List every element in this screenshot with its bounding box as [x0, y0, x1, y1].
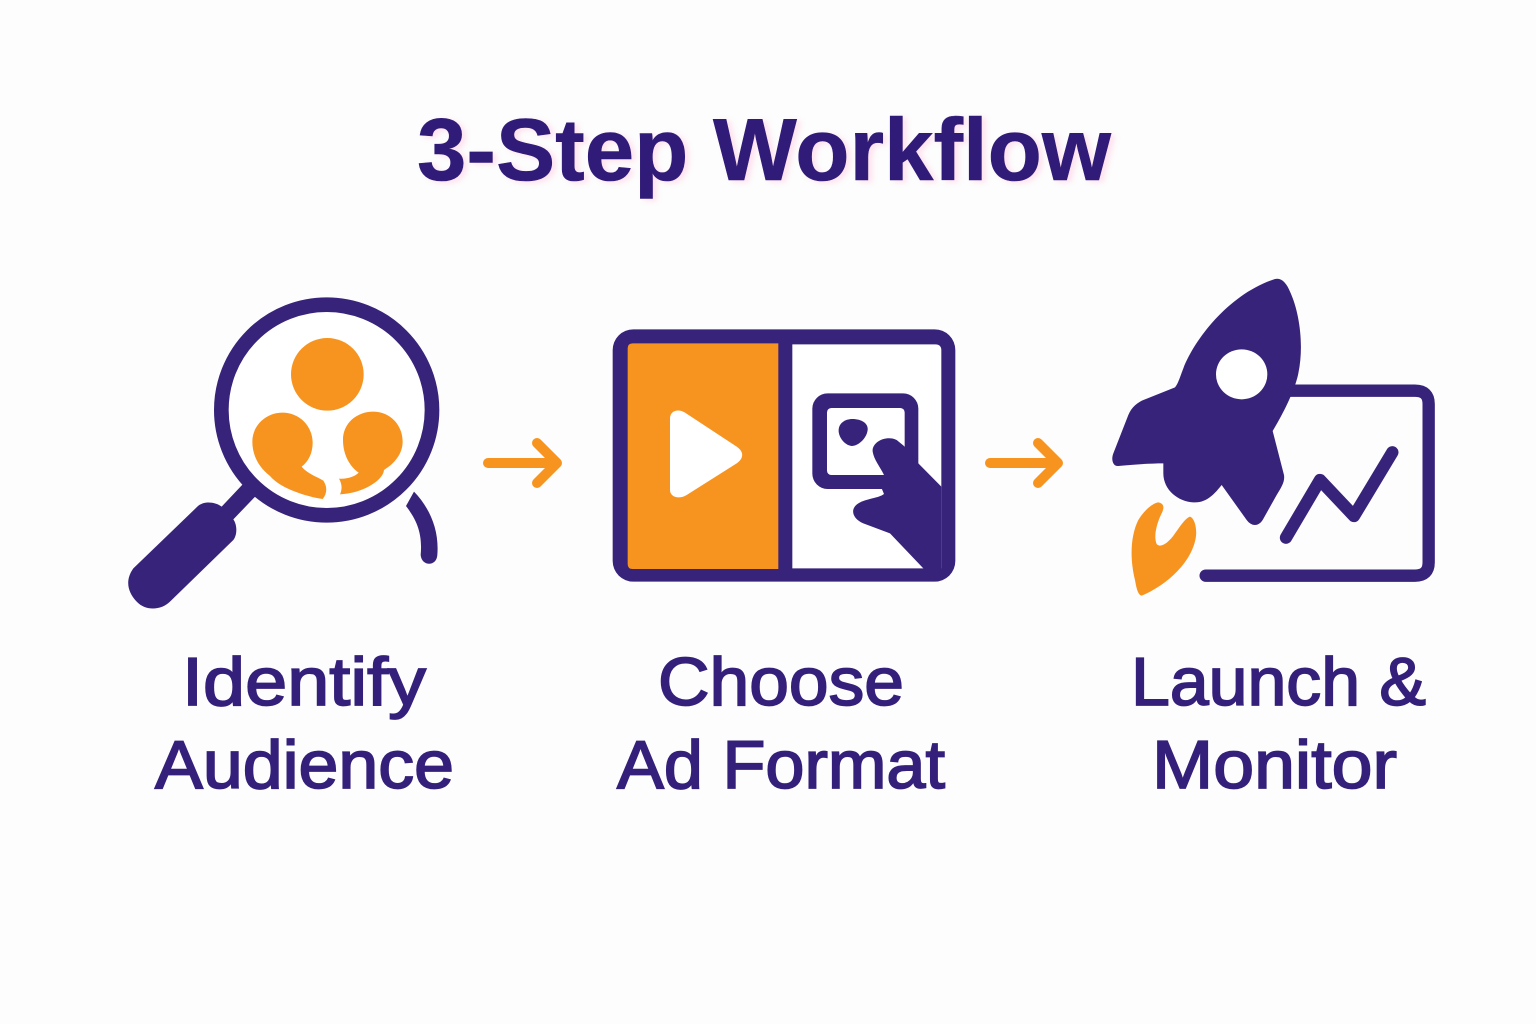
label: Identify Audience: Identify [182, 644, 426, 720]
magnifier lens ring [221, 305, 432, 515]
audience person: left [252, 413, 326, 499]
label: Identify Audience: Audience [155, 727, 454, 803]
play button [670, 411, 742, 497]
image thumbnail frame [812, 393, 918, 489]
rocket flame [1132, 502, 1196, 596]
icon: magnifying glass with audience [128, 305, 438, 609]
label: Identify Audience [155, 644, 454, 803]
arrow: step 2 to step 3 [990, 443, 1058, 483]
icon: rocket and chart [1112, 279, 1429, 596]
label: Choose Ad Format: Choose [658, 644, 904, 720]
label: Choose Ad Format: Ad Format [617, 727, 945, 803]
label: Launch & Monitor [1131, 644, 1426, 803]
rocket body [1112, 279, 1301, 525]
pointing hand [853, 438, 941, 577]
title: 3-Step Workflow [417, 100, 1112, 199]
image side [792, 344, 941, 568]
audience person: right [339, 412, 403, 494]
chart frame [1206, 391, 1429, 576]
label: Launch & Monitor: Launch & [1131, 644, 1426, 720]
thumbnail blob [839, 419, 868, 446]
rocket window [1216, 349, 1267, 399]
arrow: step 1 to step 2 [488, 443, 557, 483]
icon: ad format panel [613, 329, 955, 582]
chart trend line [1286, 452, 1392, 538]
video side [628, 343, 778, 569]
audience person: top [291, 338, 364, 411]
magnifier handle [128, 478, 258, 609]
image thumbnail interior [827, 408, 905, 475]
curved accent stroke [406, 492, 438, 564]
label: Launch & Monitor: Monitor [1152, 727, 1397, 803]
label: Choose Ad Format [617, 644, 945, 803]
panel frame [613, 329, 955, 582]
